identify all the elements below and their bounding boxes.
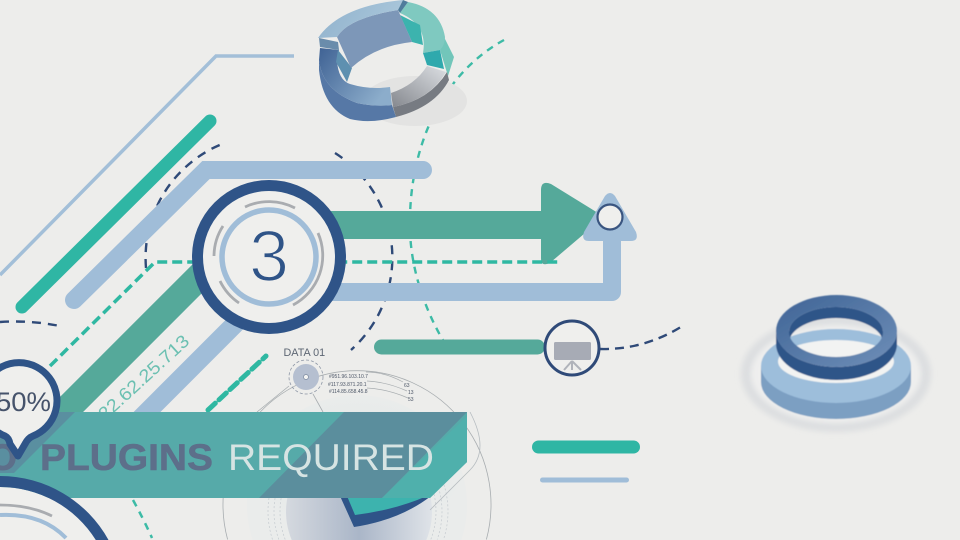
light blue segment bbox=[318, 0, 412, 68]
base ring bbox=[761, 329, 911, 419]
lower badge bbox=[0, 476, 108, 540]
banner dark band bbox=[259, 412, 467, 498]
banner left shade bbox=[0, 412, 75, 473]
teal segment bbox=[400, 2, 454, 76]
right 3D stacked rings bbox=[741, 295, 931, 432]
banner bbox=[0, 412, 467, 498]
banner heading bbox=[0, 437, 434, 478]
halo bbox=[247, 395, 467, 540]
green diagonal bar bbox=[40, 258, 218, 436]
data rows: 53 bbox=[408, 397, 414, 403]
number 3 badge: 3 bbox=[249, 217, 289, 297]
teal short bar bbox=[532, 440, 640, 454]
data rows bbox=[328, 374, 414, 403]
teal dashed curve bbox=[410, 40, 504, 342]
outer circle bbox=[223, 371, 491, 540]
teal dashed connector bbox=[50, 262, 560, 366]
icon: projector bbox=[554, 342, 591, 370]
data rows: #117.93.871.20.1 bbox=[328, 382, 367, 388]
teal dashed diagonal bbox=[208, 356, 266, 410]
light blue return arrow bbox=[330, 193, 637, 292]
blue diagonal bar bbox=[130, 309, 250, 429]
node circle bbox=[598, 204, 622, 230]
grey segment bbox=[391, 66, 449, 117]
percentage bubble bbox=[0, 363, 57, 456]
banner heading: REQUIRED bbox=[228, 437, 434, 478]
data row arcs bbox=[366, 372, 408, 398]
data rows: #951.96.103.10.7 bbox=[329, 374, 368, 380]
number 3 badge bbox=[198, 186, 340, 328]
data label: DATA 01 bbox=[284, 347, 325, 359]
blue short bar bbox=[540, 478, 629, 482]
teal diagonal bar bbox=[22, 121, 210, 307]
ring shadow bbox=[363, 76, 467, 126]
3D wedge bbox=[340, 496, 431, 527]
data node bbox=[289, 360, 323, 394]
data rows: 13 bbox=[408, 390, 414, 396]
connector lines bbox=[257, 386, 323, 412]
navy dashed tail bbox=[600, 325, 684, 349]
banner heading: PLUGINS bbox=[40, 437, 213, 478]
upper ring bbox=[776, 295, 897, 380]
ring shadow bbox=[741, 316, 931, 432]
light blue elbow bar bbox=[74, 170, 423, 300]
data radar panel bbox=[223, 347, 491, 540]
teal dashed lower curve bbox=[133, 500, 152, 538]
sphere bbox=[286, 439, 432, 540]
data rows: 63 bbox=[404, 383, 410, 389]
navy segment bbox=[319, 48, 396, 121]
green arrow bbox=[320, 183, 598, 264]
top 3D segmented ring bbox=[318, 0, 467, 126]
banner light corner bbox=[382, 416, 467, 498]
thin angled line bbox=[0, 56, 294, 275]
navy dashed circle arcs bbox=[0, 144, 392, 350]
concentric dashed rings bbox=[268, 421, 448, 540]
IP address label: 22.62.25.713 bbox=[94, 331, 193, 424]
data rows: #114.85.658.45.8 bbox=[329, 389, 368, 395]
projector node bbox=[374, 321, 599, 375]
faint wedge lines bbox=[430, 412, 480, 510]
